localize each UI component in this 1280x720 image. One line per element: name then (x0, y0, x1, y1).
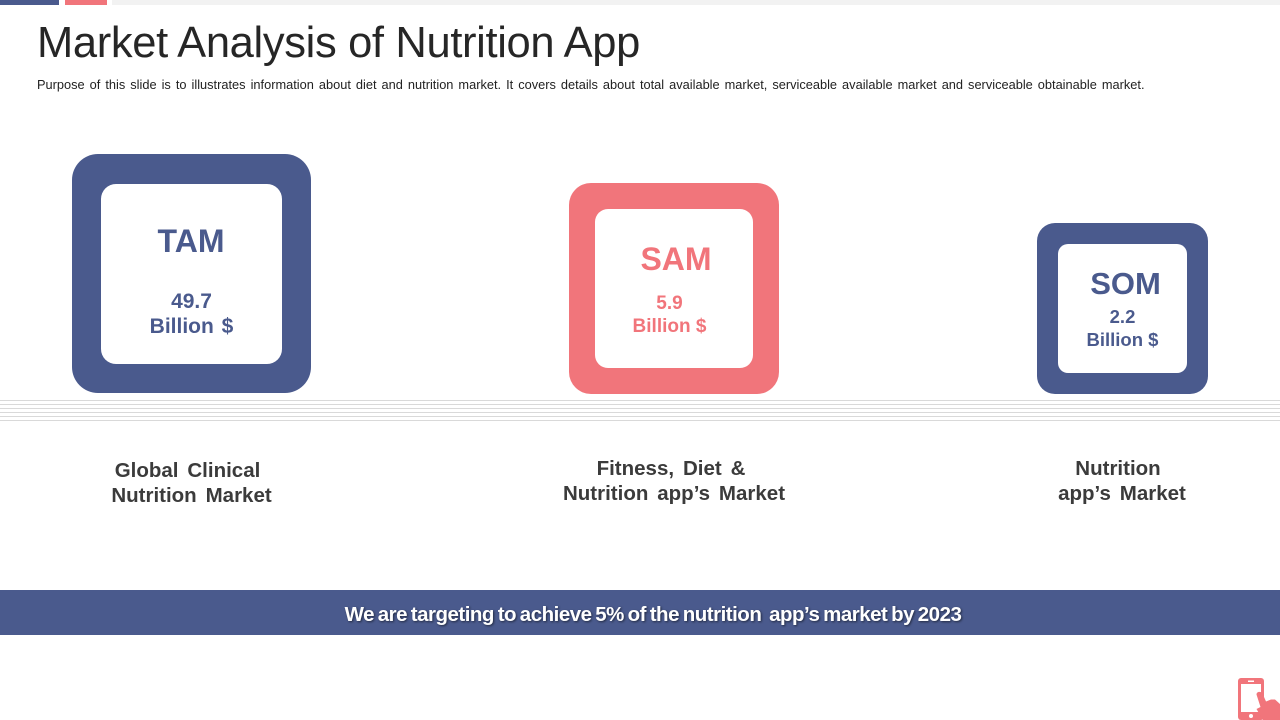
SOM value: Billion $ (1087, 329, 1158, 350)
SOM value: 2.2 (1110, 306, 1135, 327)
caption: SOM market: app’s Market (1058, 482, 1186, 505)
icon: phone with tapping hand (1238, 678, 1280, 720)
caption: TAM market: Global Clinical (115, 459, 260, 482)
panel: TAM (72, 154, 311, 393)
banner text: We are targeting to achieve 5% of the nutrition app’s market by 2023 (345, 603, 961, 626)
panel: SOM (1037, 223, 1208, 394)
title: Market Analysis of Nutrition App (37, 19, 640, 67)
caption: TAM market: Nutrition Market (111, 484, 272, 507)
banner (0, 590, 1280, 635)
caption: SAM market (563, 457, 785, 505)
SOM label: SOM (1090, 266, 1161, 301)
TAM label: TAM (158, 223, 224, 259)
SOM value (1087, 306, 1158, 350)
caption: SOM market (1058, 457, 1186, 505)
TAM value (150, 290, 233, 338)
TAM inner card (101, 184, 282, 364)
SOM inner card (1058, 244, 1187, 373)
panel: SAM (569, 183, 779, 394)
top accent bar (0, 0, 1280, 5)
SAM inner card (595, 209, 753, 368)
SAM value: Billion $ (633, 316, 706, 337)
TAM value: Billion $ (150, 315, 233, 338)
SAM value: 5.9 (656, 293, 683, 314)
subtitle description: Purpose of this slide is to illustrates information about diet and nutrition market. It covers details about total available market, serviceable available market and serviceable obtainable market. (37, 77, 1145, 92)
caption: SOM market: Nutrition (1075, 457, 1161, 480)
caption: SAM market: Nutrition app’s Market (563, 482, 785, 505)
SAM value (633, 293, 706, 337)
SAM label: SAM (640, 241, 712, 277)
TAM value: 49.7 (171, 290, 212, 313)
caption: SAM market: Fitness, Diet & (597, 457, 745, 480)
horizontal baseline stripes (0, 400, 1280, 421)
caption: TAM market (111, 459, 272, 507)
